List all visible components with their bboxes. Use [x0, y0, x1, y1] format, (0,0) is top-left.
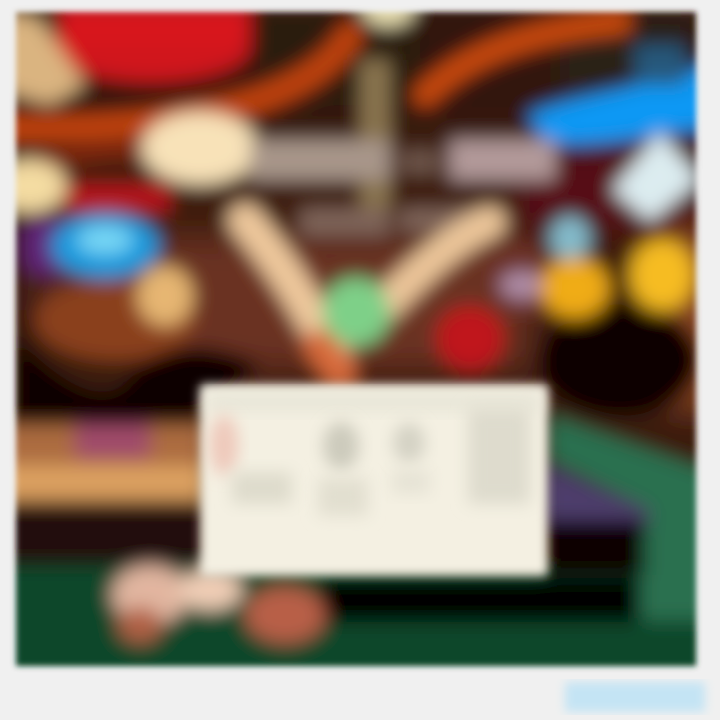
- footer highlight: [565, 682, 705, 712]
- card text: first figure: [318, 478, 368, 516]
- green felt: [0, 415, 720, 690]
- cream lamps left: [0, 112, 258, 212]
- red band left: [65, 184, 170, 212]
- card text: second figure: [392, 470, 430, 494]
- light blue shape right: [612, 132, 700, 222]
- left figure: [15, 266, 260, 422]
- right figure: [436, 216, 700, 416]
- card column: left text: [232, 472, 292, 504]
- raised arms: [245, 220, 490, 372]
- cyan glasses: [24, 214, 159, 278]
- orange arches: [10, 22, 620, 170]
- table left: [0, 425, 204, 565]
- card top shading: [206, 392, 542, 412]
- blue banner: [528, 45, 720, 144]
- title band: [250, 140, 555, 236]
- chips and hands at bottom: [112, 565, 325, 643]
- red awning: [50, 6, 250, 82]
- central column: [360, 0, 414, 230]
- card icon: second figure: [393, 423, 425, 463]
- card icon: first figure: [323, 422, 359, 470]
- green chip: [322, 278, 390, 346]
- card: central data panel: [200, 384, 548, 576]
- top-left lamp: [0, 10, 85, 105]
- card red accent: [210, 415, 238, 475]
- card column: right text: [468, 408, 530, 504]
- upper wall: [0, 0, 720, 410]
